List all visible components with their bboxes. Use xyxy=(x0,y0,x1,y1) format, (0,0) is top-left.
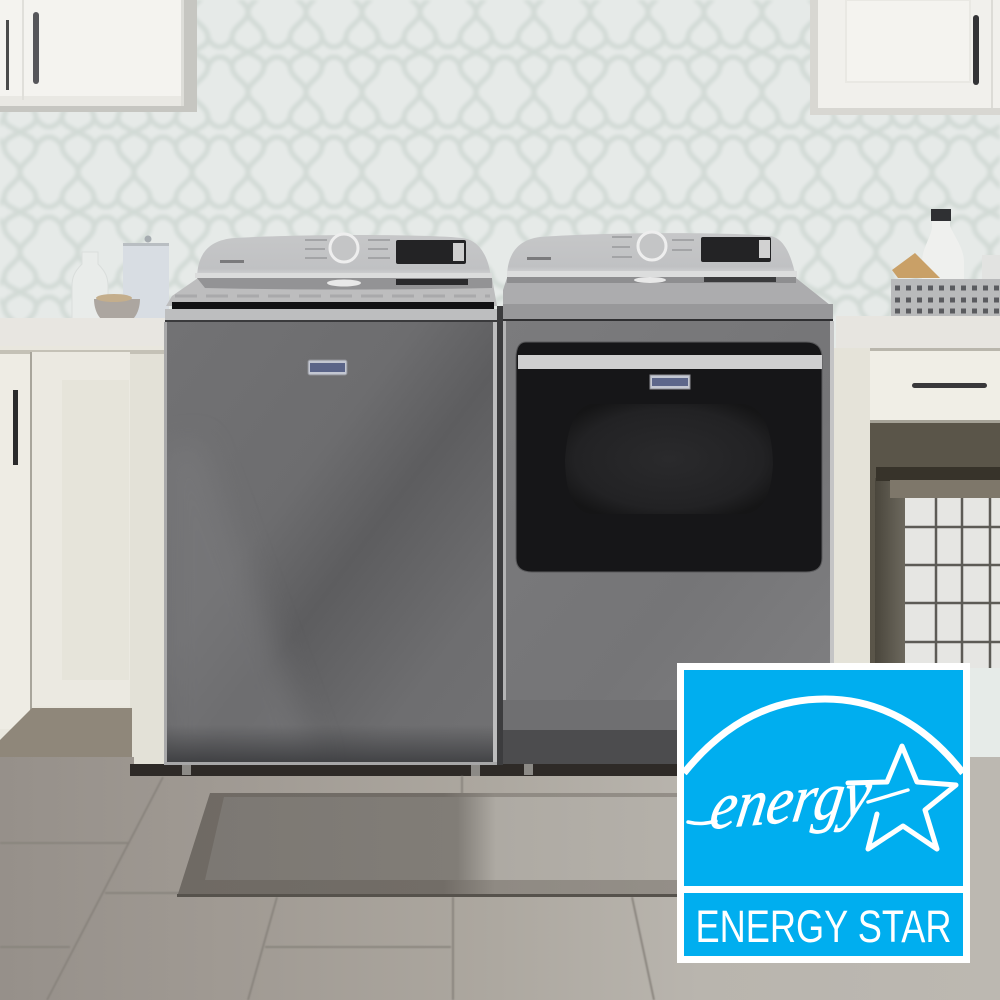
dryer door xyxy=(516,342,822,572)
floor xyxy=(0,757,1000,1000)
dryer xyxy=(503,232,834,775)
logo script word: energy xyxy=(706,756,877,844)
floor mat xyxy=(177,793,690,897)
washer xyxy=(164,234,497,776)
logo swoosh xyxy=(688,790,908,824)
wallpaper wall xyxy=(0,0,1000,330)
dryer door handle xyxy=(518,355,822,369)
items on left counter: jar, bowl, canister xyxy=(72,236,169,322)
dryer foot xyxy=(524,764,533,775)
washer body xyxy=(164,322,497,764)
washer feet xyxy=(182,765,480,776)
right counter items: bottle, basket, brush xyxy=(891,209,1000,318)
left base cabinets xyxy=(0,346,166,764)
logo white frame xyxy=(677,663,970,963)
right base cabinet and drawer xyxy=(834,348,1000,668)
upper cabinet right xyxy=(810,0,1000,115)
energy star logo xyxy=(677,663,970,963)
washer lid xyxy=(166,278,497,306)
logo name band xyxy=(684,893,963,956)
washer control panel xyxy=(195,234,492,280)
dryer body xyxy=(503,321,834,732)
right counter top xyxy=(836,316,1000,349)
gap between machines xyxy=(497,306,503,765)
washer badge xyxy=(308,360,347,375)
dryer drum window xyxy=(565,404,773,514)
left counter top xyxy=(0,318,166,350)
wire laundry hamper xyxy=(875,467,1000,668)
dryer badge xyxy=(650,375,690,389)
upper cabinet left xyxy=(0,0,197,112)
logo star xyxy=(848,746,956,849)
dryer top xyxy=(503,278,832,322)
logo blue field xyxy=(684,670,963,886)
dryer control panel xyxy=(507,232,797,278)
logo arc xyxy=(684,699,963,773)
